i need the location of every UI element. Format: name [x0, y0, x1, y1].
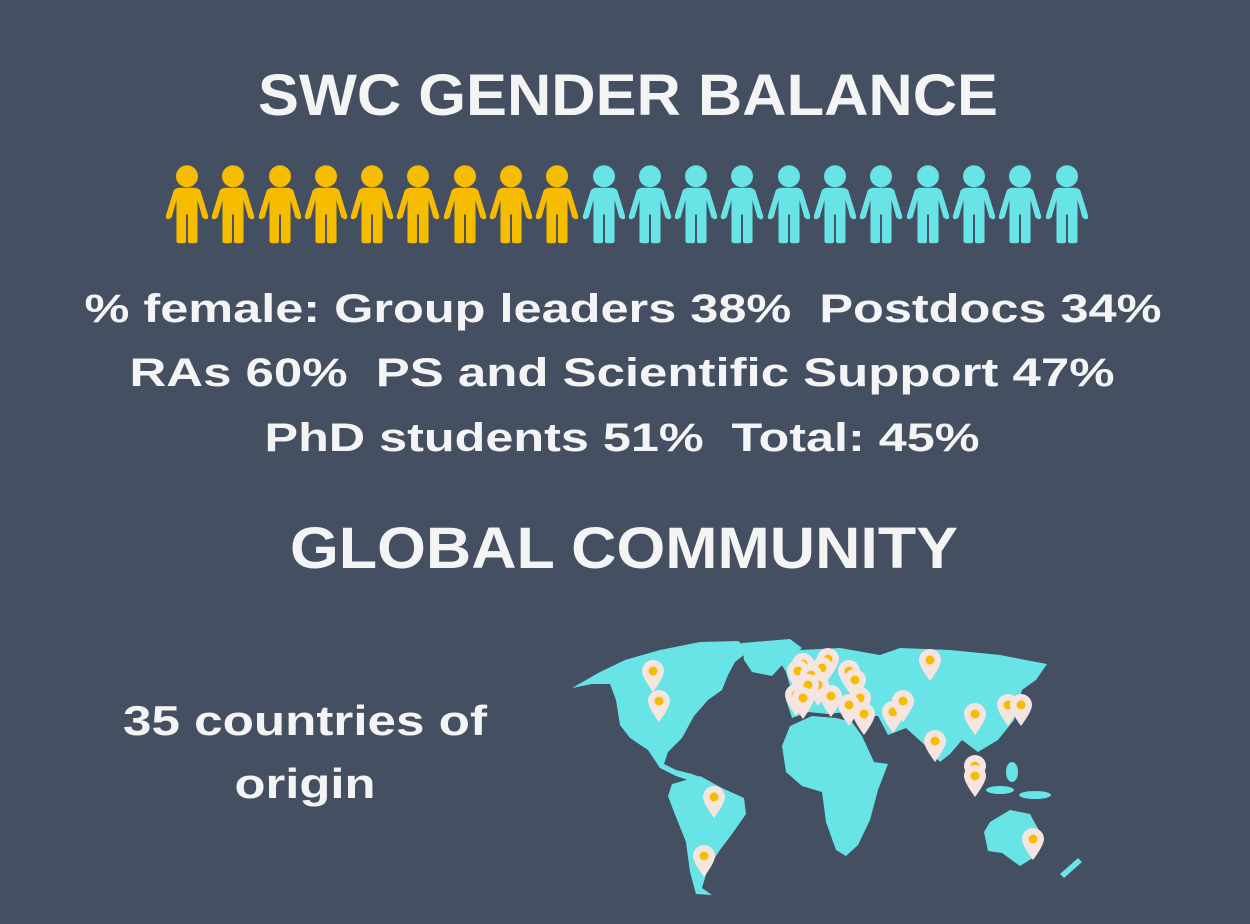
text: 35 countries of origin: origin [234, 760, 376, 807]
text: 35 countries of origin: 35 countries of [123, 697, 488, 744]
heading: global community: GLOBAL COMMUNITY [290, 516, 958, 581]
stats text block: RAs 60% PS and Scientific Support 47% [130, 351, 1114, 395]
people icons row [166, 165, 1088, 243]
title: SWC gender balance: SWC GENDER BALANCE [258, 63, 998, 128]
stats text block: % female: Group leaders 38% Postdocs 34% [84, 287, 1162, 331]
stats text block: PhD students 51% Total: 45% [264, 416, 979, 460]
stats text block [84, 287, 1162, 460]
text: 35 countries of origin [123, 697, 488, 807]
world map with pins [572, 639, 1082, 895]
